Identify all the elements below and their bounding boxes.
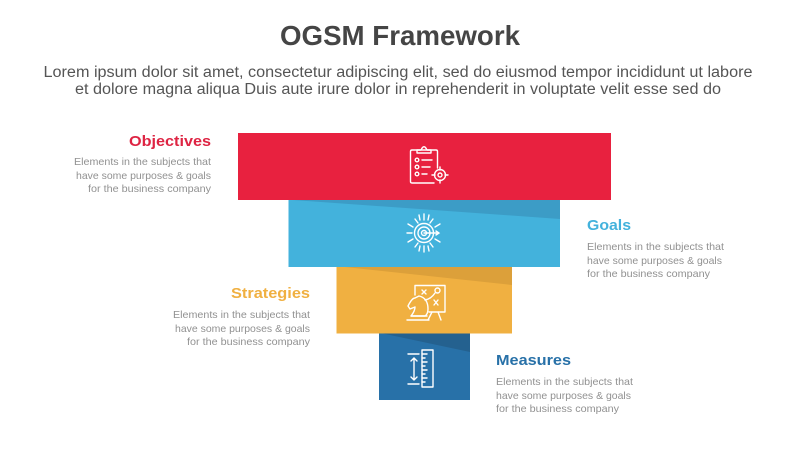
text block: strategies: Strategies	[231, 285, 310, 302]
panel: objectives bar	[238, 133, 611, 200]
subtitle: et dolore magna aliqua Duis aute irure dolor in reprehenderit in voluptate velit esse sed do	[75, 81, 721, 98]
panel: goals bar	[288, 200, 560, 267]
text block: measures: have some purposes & goals	[496, 390, 631, 402]
text block: measures: for the business company	[496, 403, 620, 415]
subtitle	[44, 64, 752, 98]
panel: strategies bar	[336, 267, 512, 334]
text block: objectives: have some purposes & goals	[76, 170, 211, 182]
text block: objectives: Elements in the subjects that	[74, 156, 211, 168]
text block: goals: have some purposes & goals	[587, 255, 722, 267]
text block: strategies: have some purposes & goals	[175, 323, 310, 335]
subtitle: Lorem ipsum dolor sit amet, consectetur adipiscing elit, sed do eiusmod tempor incididunt ut labore	[44, 64, 752, 81]
text block: goals: Goals	[587, 217, 631, 234]
icon: clipboard with target	[410, 147, 448, 183]
text block: measures	[496, 352, 633, 415]
text block: goals: Elements in the subjects that	[587, 241, 724, 253]
icon: target with rays	[407, 214, 440, 252]
text block: strategies: Elements in the subjects that	[173, 309, 310, 321]
text block: objectives: for the business company	[88, 183, 212, 195]
title: OGSM Framework	[280, 20, 520, 51]
text block: measures: Measures	[496, 352, 571, 369]
text block: measures: Elements in the subjects that	[496, 376, 633, 388]
icon: chess knight and board	[407, 286, 445, 320]
text block: strategies: for the business company	[187, 336, 311, 348]
icon: ruler with arrow	[408, 350, 433, 387]
text block: strategies	[173, 285, 311, 348]
text block: goals: for the business company	[587, 268, 711, 280]
text block: objectives	[74, 133, 212, 195]
text block: goals	[587, 217, 724, 280]
text block: objectives: Objectives	[129, 133, 211, 150]
panel: measures bar	[379, 334, 470, 400]
